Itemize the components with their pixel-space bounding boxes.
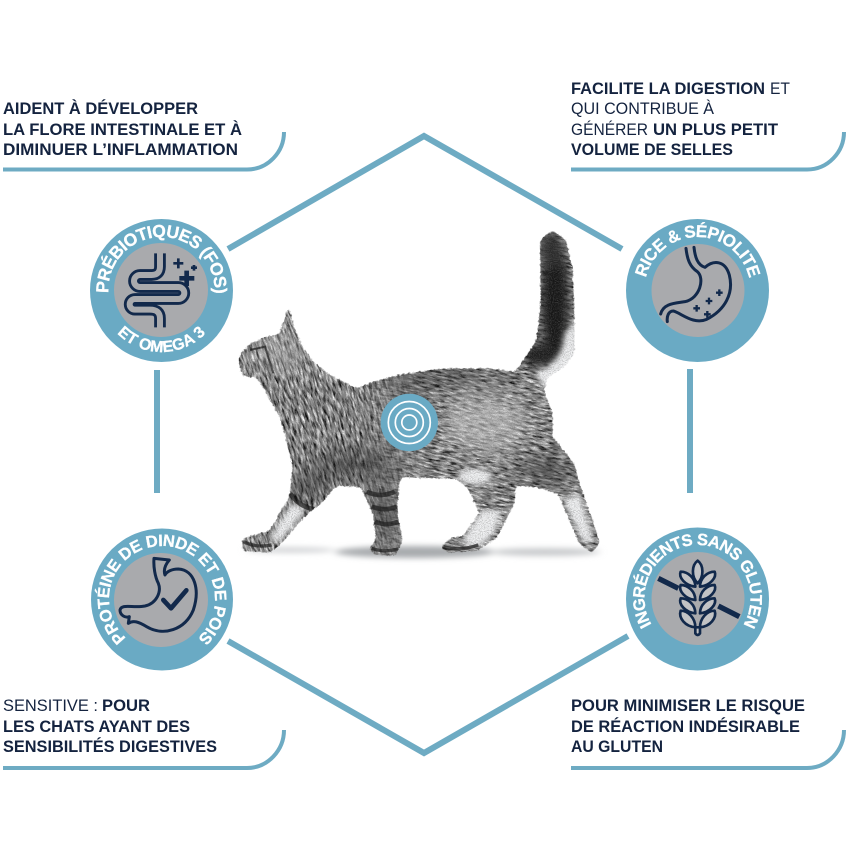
text block: top right: UN PLUS PETIT bbox=[653, 120, 779, 139]
text block: top right: ET bbox=[770, 79, 790, 98]
text block: top left: AIDENT À DÉVELOPPER bbox=[3, 99, 198, 118]
icon: intestine bbox=[130, 252, 197, 329]
label: turkey and pea protein: PROTÉINE DE DINDE ET DE POIS bbox=[94, 534, 227, 646]
hexagon frame bbox=[157, 136, 690, 753]
text block: top right: VOLUME DE SELLES bbox=[571, 140, 733, 159]
badge: rice and sepiolite bbox=[626, 219, 769, 362]
icon: stomach with check bbox=[120, 558, 196, 631]
text block: bottom right bbox=[571, 696, 844, 768]
text block: top right: FACILITE LA DIGESTION bbox=[571, 79, 765, 98]
text block: bottom right: AU GLUTEN bbox=[571, 737, 663, 756]
text block: bottom left: LES CHATS AYANT DES bbox=[3, 717, 190, 736]
text block: bottom right: DE RÉACTION INDÉSIRABLE bbox=[571, 717, 800, 736]
text block: top right: QUI CONTRIBUE À bbox=[571, 99, 715, 118]
label: prebiotics: PRÉBIOTIQUES (FOS) bbox=[96, 224, 228, 293]
badge: prebiotics bbox=[90, 219, 233, 362]
text block: top left bbox=[3, 99, 284, 170]
text block: top left: DIMINUER L’INFLAMMATION bbox=[3, 140, 238, 159]
badge: gluten free bbox=[626, 528, 769, 670]
text block: bottom right: POUR MINIMISER LE RISQUE bbox=[571, 696, 805, 715]
text block: bottom left: POUR bbox=[102, 696, 150, 715]
badge: turkey and pea protein bbox=[91, 528, 233, 670]
icon: stomach with pluses bbox=[661, 247, 731, 322]
text block: bottom left: SENSIBILITÉS DIGESTIVES bbox=[3, 737, 217, 756]
text block: top left: LA FLORE INTESTINALE ET À bbox=[3, 120, 242, 139]
cat shadow bbox=[245, 546, 600, 558]
cat photo bbox=[238, 231, 600, 556]
digestion target marker bbox=[381, 394, 438, 451]
text block: bottom left: SENSITIVE : bbox=[3, 696, 98, 715]
text block: top right: GÉNÉRER bbox=[571, 120, 648, 139]
icon: crossed wheat bbox=[658, 561, 739, 635]
label: omega 3: ET OMEGA 3 bbox=[118, 326, 204, 352]
text block: top right bbox=[571, 79, 844, 170]
text block: bottom left bbox=[3, 696, 284, 768]
label: rice and sepiolite: RICE & SÉPIOLITE bbox=[634, 222, 760, 278]
label: gluten free: INGRÉDIENTS SANS GLUTEN bbox=[632, 534, 762, 630]
